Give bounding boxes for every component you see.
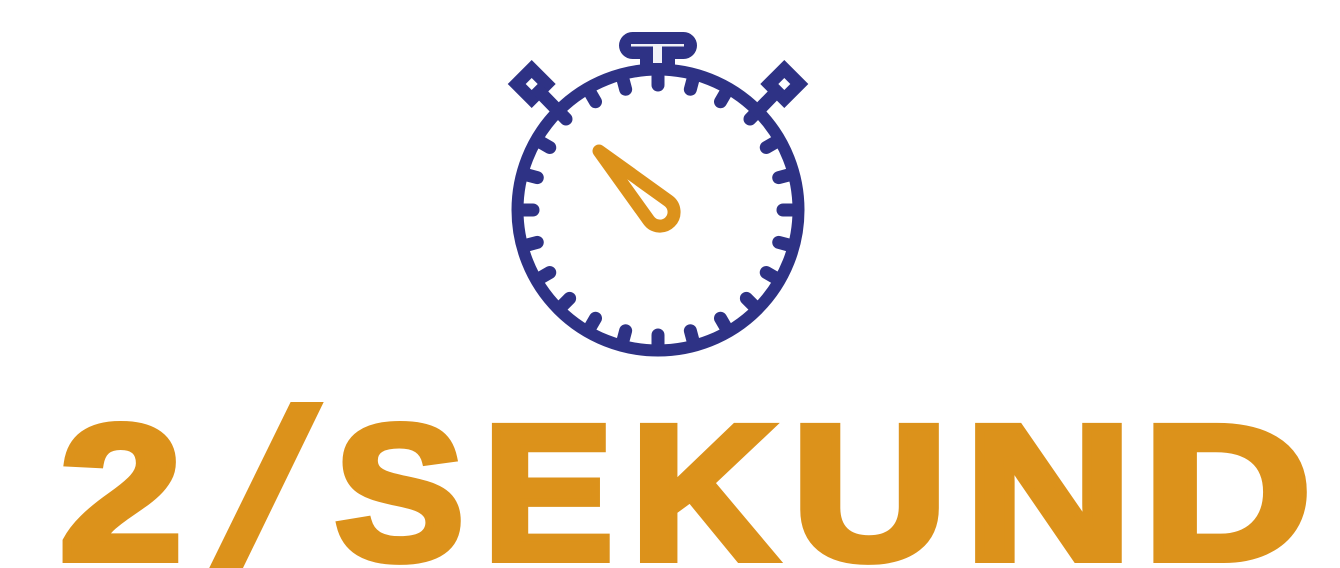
stopwatch crown button <box>619 32 697 68</box>
heading: 2/SEKUND <box>60 361 1312 568</box>
icon: stopwatch <box>508 32 808 350</box>
stopwatch ring <box>518 70 798 350</box>
stopwatch side pushers <box>508 60 808 119</box>
stopwatch hand <box>599 151 674 226</box>
stopwatch tick marks <box>524 76 792 344</box>
